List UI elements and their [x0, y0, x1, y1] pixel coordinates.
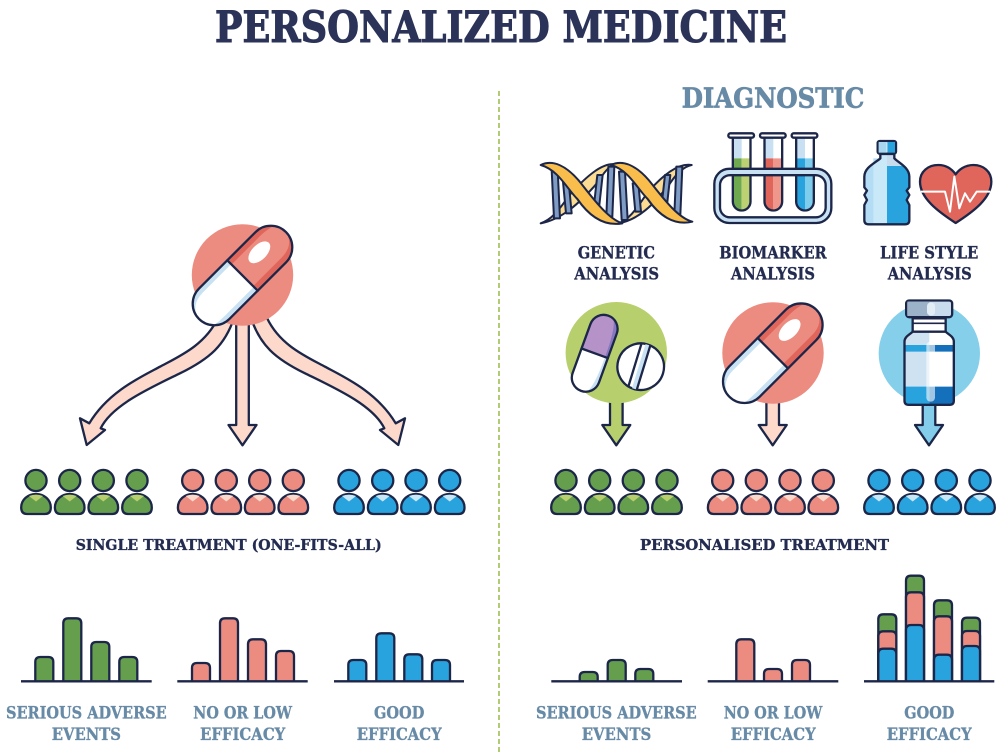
people: right red group — [708, 470, 838, 514]
arrow: green down — [602, 398, 630, 445]
bar chart: personalised serious adverse events — [551, 660, 682, 681]
icon: heart with pulse — [920, 165, 991, 223]
label: no or low efficacy right — [724, 703, 823, 745]
label: serious adverse events left: EVENTS — [52, 725, 121, 745]
icon: personalised pill — [714, 295, 831, 412]
label: good efficacy left: EFFICACY — [357, 725, 442, 745]
label: good efficacy left — [357, 703, 442, 745]
label: biomarker analysis: ANALYSIS — [730, 264, 815, 284]
label: no or low efficacy left: NO OR LOW — [193, 703, 293, 723]
arrow: red down — [759, 398, 787, 445]
icon: water bottle — [864, 141, 909, 224]
center divider — [498, 91, 500, 753]
label: good efficacy right: GOOD — [904, 703, 955, 723]
label: good efficacy right — [887, 703, 972, 745]
bar chart: personalised good efficacy stacked — [864, 576, 994, 681]
arrow: left curved — [80, 318, 234, 445]
label: serious adverse events left: SERIOUS ADVERSE — [6, 703, 167, 723]
label: no or low efficacy right: EFFICACY — [731, 725, 816, 745]
people: right green group — [551, 470, 682, 514]
heading: diagnostic: DIAGNOSTIC — [682, 83, 864, 114]
label: life style analysis — [880, 243, 978, 284]
label: biomarker analysis: BIOMARKER — [719, 243, 827, 263]
label: single treatment: SINGLE TREATMENT (ONE-FITS-ALL) — [76, 537, 382, 554]
arrow: center straight — [228, 318, 256, 445]
bar chart: personalised no or low efficacy — [708, 639, 838, 681]
icon: test tubes in rack — [714, 133, 831, 223]
label: no or low efficacy left: EFFICACY — [200, 725, 286, 745]
arrow: right curved — [251, 318, 405, 445]
title: PERSONALIZED MEDICINE — [215, 3, 787, 53]
icon: capsule and tablet — [566, 302, 670, 403]
label: personalised treatment: PERSONALISED TREATMENT — [640, 537, 889, 554]
label: no or low efficacy left — [193, 703, 293, 745]
label: life style analysis: LIFE STYLE — [880, 243, 978, 263]
label: no or low efficacy right: NO OR LOW — [724, 703, 823, 723]
bar chart: single good efficacy — [334, 633, 464, 681]
label: genetic analysis: ANALYSIS — [573, 264, 659, 284]
icon: single treatment pill — [184, 217, 301, 334]
label: good efficacy right: EFFICACY — [887, 725, 972, 745]
arrow: blue down — [915, 398, 943, 445]
people: left blue group — [334, 470, 465, 514]
label: serious adverse events right: EVENTS — [582, 725, 651, 745]
icon: vial — [879, 300, 980, 405]
label: good efficacy left: GOOD — [374, 703, 425, 723]
icon: DNA helix — [541, 163, 692, 224]
bar chart: single serious adverse events — [21, 618, 152, 681]
label: genetic analysis — [573, 243, 659, 284]
label: life style analysis: ANALYSIS — [887, 264, 972, 284]
people: left green group — [21, 470, 152, 514]
label: genetic analysis: GENETIC — [578, 243, 655, 263]
label: serious adverse events left — [6, 703, 167, 745]
people: right blue group — [864, 470, 995, 514]
label: biomarker analysis — [719, 243, 827, 284]
people: left red group — [178, 470, 308, 514]
label: serious adverse events right — [536, 703, 697, 745]
label: serious adverse events right: SERIOUS ADVERSE — [536, 703, 697, 723]
bar chart: single no or low efficacy — [177, 618, 308, 681]
